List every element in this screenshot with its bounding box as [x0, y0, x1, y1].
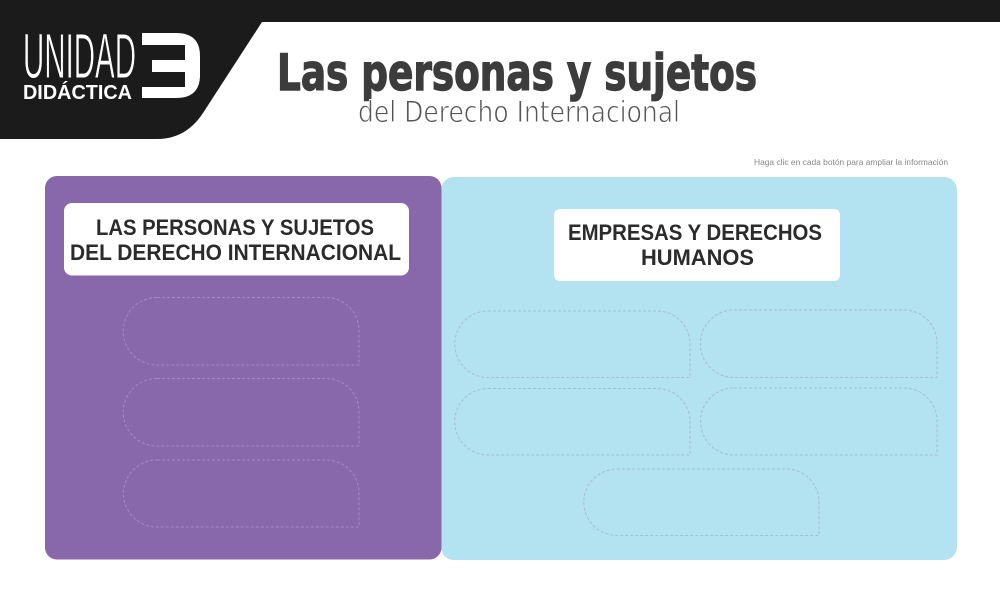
button placeholder 5 — [584, 469, 819, 536]
title: Las personas y sujetos — [277, 44, 757, 102]
button placeholder 3 — [455, 388, 690, 455]
unit badge — [23, 20, 200, 104]
instruction note: Haga clic en cada botón para ampliar la información — [754, 157, 948, 167]
panel: las personas y sujetos — [45, 176, 442, 560]
button placeholder 2 — [123, 378, 359, 446]
button placeholder 1 — [455, 311, 690, 378]
unit badge: UNIDAD — [23, 20, 136, 92]
button placeholder 3 — [123, 460, 359, 527]
button placeholder 2 — [700, 310, 937, 378]
panel: empresas y derechos humanos — [441, 177, 957, 560]
unit label: DIDÁCTICA: DIDÁCTICA — [23, 81, 132, 104]
heading box: empresas: HUMANOS — [641, 245, 754, 270]
heading box: empresas: EMPRESAS Y DERECHOS — [568, 220, 822, 245]
unit number 3 — [142, 33, 200, 98]
subtitle: del Derecho Internacional — [358, 95, 680, 129]
header banner — [0, 0, 1000, 139]
heading box: personas: DEL DERECHO INTERNACIONAL — [70, 240, 401, 265]
button placeholder 1 — [123, 298, 359, 365]
button placeholder 4 — [700, 388, 937, 455]
heading box: personas — [64, 203, 409, 276]
heading box: empresas — [554, 209, 840, 281]
heading box: personas: LAS PERSONAS Y SUJETOS — [96, 215, 374, 240]
